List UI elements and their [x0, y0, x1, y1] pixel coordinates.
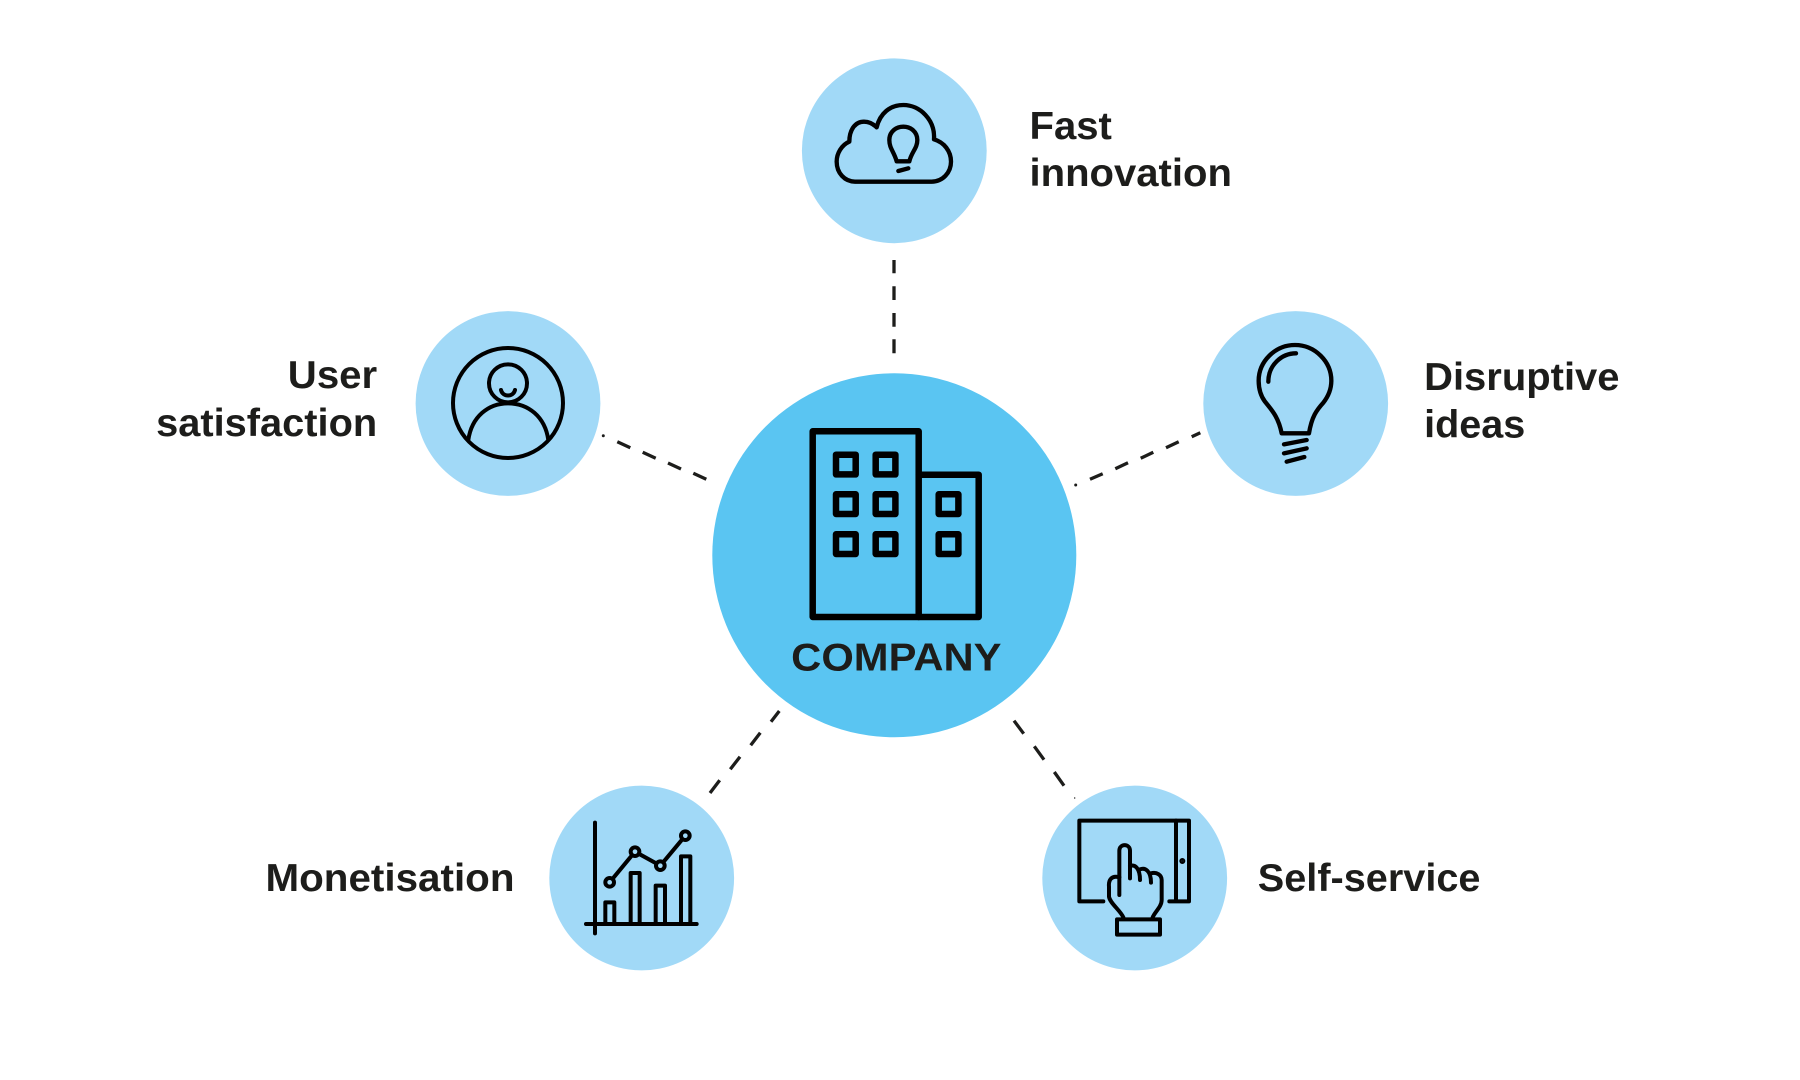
node circle [416, 311, 600, 496]
node circle [549, 786, 734, 970]
hub circle [712, 373, 1076, 737]
connector: fast innovation [892, 260, 896, 353]
label: monetisation: Monetisation [266, 857, 514, 900]
icon: line and bar chart [586, 823, 697, 933]
label: fast innovation [1030, 105, 1232, 195]
label: user satisfaction [156, 354, 377, 445]
icon: light bulb [1259, 345, 1331, 462]
label: disruptive ideas: ideas [1424, 403, 1525, 446]
icon: smiling user [453, 348, 563, 458]
panel: self-service [1042, 786, 1480, 970]
label: fast innovation: innovation [1030, 152, 1232, 195]
label: fast innovation: Fast [1030, 105, 1112, 148]
connector: disruptive ideas [1075, 433, 1200, 486]
node circle [802, 58, 987, 243]
connector: monetisation [710, 711, 779, 793]
label: self-service: Self-service [1258, 857, 1480, 900]
node circle [1042, 786, 1227, 970]
label: disruptive ideas: Disruptive [1424, 356, 1620, 399]
icon: cloud with light bulb [837, 105, 951, 182]
connector: self-service [1014, 721, 1075, 798]
label: disruptive ideas [1424, 356, 1620, 446]
panel: monetisation [266, 786, 734, 970]
connector: user satisfaction [602, 435, 706, 479]
icon: office buildings [813, 431, 979, 617]
panel: disruptive ideas [1203, 311, 1620, 496]
node circle [1203, 311, 1388, 496]
label: user satisfaction: satisfaction [156, 402, 377, 445]
icon: hand touching tablet [1079, 821, 1189, 935]
panel: fast innovation [802, 58, 1232, 243]
label: user satisfaction: User [288, 354, 377, 397]
panel: company hub [712, 373, 1076, 737]
label: company: COMPANY [791, 637, 1002, 680]
panel: user satisfaction [156, 311, 600, 496]
